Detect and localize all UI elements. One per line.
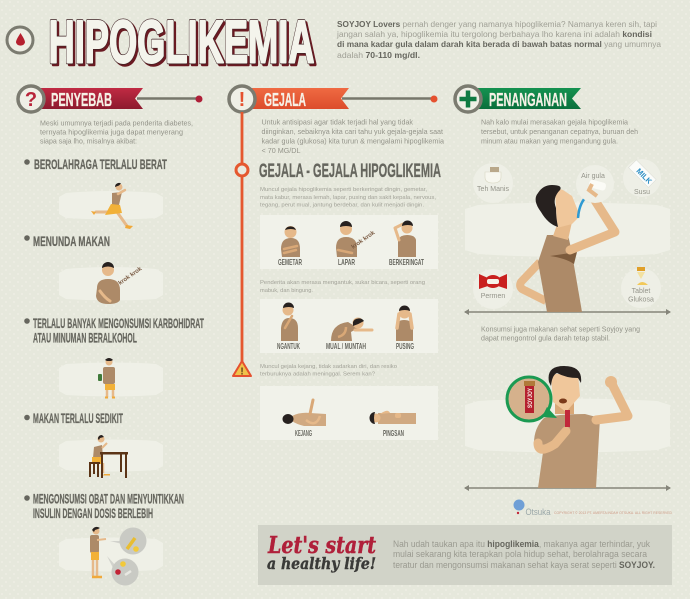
icon: teh manis	[473, 163, 513, 203]
cause 4: eating too little: MAKAN TERLALU SEDIKIT	[33, 410, 123, 426]
labels	[277, 341, 414, 351]
text: early symptoms: mata kabur, merasa lemah, lapar, pusing dan sakit kepala, nervous,	[260, 195, 436, 201]
panel: gejala header: GEJALA	[264, 90, 306, 110]
icon: pusing	[396, 306, 413, 341]
text: gejala intro	[262, 118, 445, 155]
icon: pingsan	[370, 411, 416, 424]
icon: susu: MILK	[634, 166, 654, 186]
text: gejala intro: Untuk antisipasi agar tidak terjadi hal yang tidak	[262, 118, 413, 126]
text: penanganan intro: tersebut, untuk penanganan cepatnya, buruan deh	[481, 127, 638, 136]
logo: otsuka copyright: COPYRIGHT © 2013 PT. AMERTA INDAH OTSUKA. ALL RIGHT RESERVED	[554, 511, 672, 515]
icon: blood drop	[7, 27, 33, 53]
panel: gemetar lapar berkeringat	[260, 215, 438, 269]
intro text	[336, 19, 661, 60]
intro text: di mana kadar gula dalam darah kita berada di bawah batas normal yang umumnya	[337, 39, 661, 49]
text: gejala intro: diinginkan, sebaiknya kita cari tahu yuk gejala-gejala saat	[262, 127, 444, 136]
title	[48, 8, 316, 78]
panel: let's start a healthy life	[258, 525, 672, 585]
illustration: man with soyjoy bar: SOYJOY	[528, 388, 534, 408]
labels: MUAL / MUNTAH	[326, 341, 366, 351]
text: penanganan intro	[481, 118, 638, 146]
icon: teh manis: Teh Manis	[477, 186, 509, 193]
labels	[295, 428, 404, 438]
panel: gejala header: !	[239, 89, 245, 111]
icon: susu	[623, 159, 661, 197]
icon: lapar: krok krok	[351, 230, 377, 251]
text: penanganan intro: minum atau makan yang mengandung gula.	[481, 136, 618, 146]
text: penyebab intro: siapa saja lho, misalnya akibat:	[40, 136, 137, 146]
icon: permen: Permen	[481, 293, 505, 300]
text: penyebab intro: Meski umumnya terjadi pada penderita diabetes,	[40, 118, 193, 128]
illustration: man with soyjoy bar	[464, 366, 671, 491]
slogan	[267, 532, 376, 573]
text: worsening symptoms: Penderita akan merasa mengantuk, sukar bicara, seperti orang	[260, 280, 425, 286]
icon: gemetar	[281, 226, 300, 257]
icon: mual muntah	[331, 318, 372, 341]
text: penanganan intro: Nah kalo mulai merasakan gejala hipoglikemia	[481, 118, 629, 126]
labels: NGANTUK	[277, 341, 300, 351]
panel: penanganan header: PENANGANAN	[489, 90, 567, 110]
title: HIPOGLIKEMIA	[50, 10, 316, 78]
panel: kejang pingsan	[260, 386, 438, 440]
panel: penanganan header	[455, 86, 581, 112]
text: early symptoms: tegang, perut mual, jantung berdebar, dan kulit menjadi dingin.	[260, 202, 424, 208]
icon: berkeringat	[395, 221, 416, 257]
illustration: man drinking	[464, 185, 671, 315]
cause 5: medicine and insulin overdose: INSULIN DENGAN DOSIS BERLEBIH	[33, 505, 153, 521]
slogan: a healthy life!	[267, 554, 376, 573]
cause 3: too many carbs or alcohol: ATAU MINUMAN BERALKOHOL	[33, 330, 137, 346]
cause 1: exercise too hard: BEROLAHRAGA TERLALU BERAT	[34, 156, 167, 172]
text: early symptoms: Muncul gejala hipoglikemia seperti berkeringat dingin, gemetar,	[260, 187, 427, 193]
cause 2: skipping meals: krok krok	[118, 266, 144, 287]
text: severe symptoms	[260, 364, 397, 378]
closing text: Nah udah taukan apa itu hipoglikemia, makanya agar terhindar, yuk	[393, 539, 650, 549]
text: worsening symptoms: mabuk, dan bingung.	[260, 288, 313, 294]
labels	[278, 257, 424, 267]
icon: ngantuk	[281, 302, 298, 341]
intro text: jangan salah ya, hipoglikemia itu tergolong berbahaya lho karena ini adalah kondisi	[336, 29, 652, 39]
panel: gejala header	[229, 86, 438, 112]
cause 1: exercise too hard	[24, 156, 167, 229]
logo: otsuka copyright	[514, 500, 672, 517]
intro text: adalah 70-110 mg/dl.	[337, 50, 420, 60]
icon: warning triangle: !	[240, 366, 244, 378]
icon: tablet glukosa: Tablet	[632, 288, 650, 295]
icon: air gula	[576, 165, 614, 203]
closing text	[393, 539, 655, 570]
text: soyjoy advice: dapat mengontrol gula darah tetap stabil.	[481, 334, 610, 342]
icon: kejang	[282, 400, 326, 426]
labels: KEJANG	[295, 428, 312, 438]
closing text: mulai sekarang kita terapkan pola hidup sehat, berolahraga secara	[393, 549, 647, 559]
heading: gejala-gejala hipoglikemia: GEJALA - GEJALA HIPOGLIKEMIA	[259, 160, 441, 182]
title: HIPOGLIKEMIA	[48, 8, 314, 76]
icon: warning triangle	[233, 361, 251, 378]
text: severe symptoms: Muncul gejala kejang, tidak sadarkan diri, dan resiko	[260, 364, 397, 370]
text: soyjoy advice: Konsumsi juga makanan sehat seperti Soyjoy yang	[481, 324, 640, 334]
text: penyebab intro: ternyata hipoglikemia juga dapat menyerang	[40, 128, 183, 136]
labels: GEMETAR	[278, 257, 302, 267]
labels: PUSING	[396, 341, 414, 351]
text: early symptoms	[260, 187, 436, 208]
text: worsening symptoms	[260, 280, 425, 294]
icon: tablet glukosa	[621, 267, 661, 308]
text: TERLALU BANYAK MENGONSUMSI KARBOHIDRAT	[33, 315, 204, 331]
slogan: Let's start	[267, 532, 376, 559]
text: severe symptoms: terburuknya adalah meninggal. Serem kan?	[260, 372, 375, 378]
cause 2: skipping meals	[24, 233, 163, 304]
title: HIPOGLIKEMIA	[48, 8, 314, 76]
panel: penyebab header	[18, 86, 202, 112]
cause 3: too many carbs or alcohol	[24, 315, 204, 398]
cause 4: eating too little	[24, 410, 163, 478]
icon: permen	[473, 269, 513, 309]
panel: ngantuk mual pusing	[260, 299, 438, 353]
labels: LAPAR	[338, 257, 355, 267]
panel: penyebab header: PENYEBAB	[51, 90, 112, 110]
logo: otsuka copyright: Otsuka	[526, 507, 550, 517]
text: soyjoy advice	[481, 324, 640, 342]
closing text: teratur dan mengonsumsi makanan sehat kaya serat seperti SOYJOY.	[393, 560, 655, 570]
panel: penyebab header: ?	[25, 89, 37, 111]
icon: susu: Susu	[634, 189, 650, 196]
text: penyebab intro	[40, 118, 193, 146]
text: gejala intro: < 70 MG/DL	[262, 146, 300, 155]
symptom timeline with ring	[236, 112, 248, 362]
cause 5: medicine and insulin overdose: MENGONSUMSI OBAT DAN MENYUNTIKKAN	[33, 490, 184, 506]
text: gejala intro: kadar gula (glukosa) kita turun & mengalami hipoglikemia	[262, 136, 445, 146]
intro text: SOYJOY Lovers pernah denger yang namanya hipoglikemia? Namanya keren sih, tapi	[337, 19, 657, 29]
icon: tablet glukosa: Glukosa	[628, 296, 654, 304]
icon: air gula: Air gula	[581, 173, 605, 180]
labels: BERKERINGAT	[389, 257, 424, 267]
labels: PINGSAN	[383, 428, 404, 438]
icon: lapar	[336, 221, 377, 257]
cause 2: skipping meals: MENUNDA MAKAN	[33, 233, 110, 249]
cause 5: medicine and insulin overdose	[24, 490, 184, 586]
